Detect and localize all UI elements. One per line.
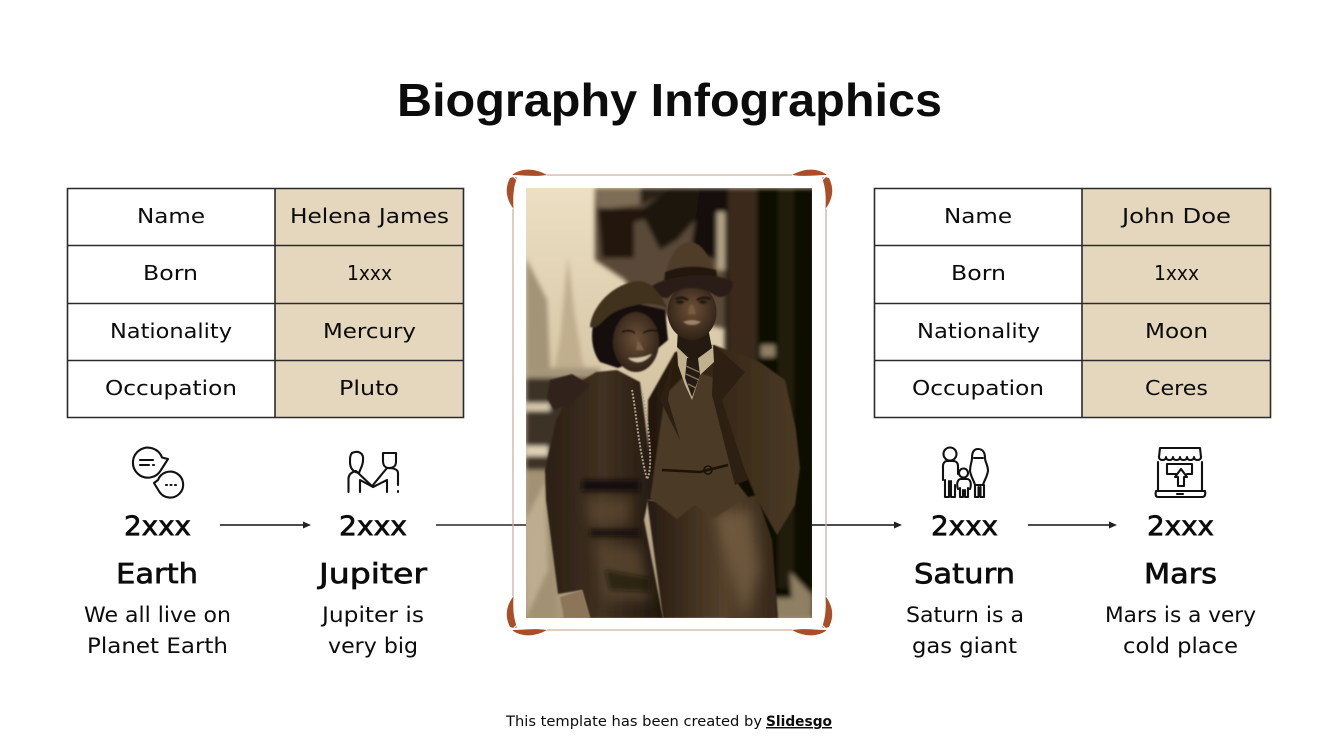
man hat <box>651 242 733 298</box>
icon: speech bubbles <box>133 448 183 498</box>
portrait photo <box>526 188 815 618</box>
panel: right biography table: 1xxx <box>1154 261 1199 285</box>
panel: right biography table: Nationality <box>917 319 1040 343</box>
panel: left biography table <box>68 188 464 418</box>
panel: left biography table: Name <box>137 204 205 228</box>
milestone: Saturn: Saturn is a <box>906 603 1024 627</box>
arrow: Jupiter to photo <box>436 524 527 526</box>
milestone: Jupiter: 2xxx <box>339 511 407 542</box>
panel: left biography table: Born <box>143 261 198 285</box>
panel: right biography table: Moon <box>1145 319 1208 343</box>
arrow: photo to Saturn <box>811 522 902 528</box>
milestone: Jupiter: Jupiter is <box>320 603 424 627</box>
woman hand on dress <box>560 590 590 618</box>
arrow: Earth to Jupiter <box>220 522 311 528</box>
milestone: Mars: Mars is a very <box>1105 603 1256 627</box>
man waistcoat <box>650 370 748 519</box>
milestone: Earth: Earth <box>116 557 198 590</box>
man hand on shoulder <box>547 374 590 410</box>
panel: right biography table: Ceres <box>1145 376 1208 400</box>
panel: right biography table <box>874 188 1271 418</box>
arrow: Saturn to Mars <box>1028 522 1117 528</box>
panel: right biography table: Born <box>951 261 1006 285</box>
man trousers <box>647 495 778 618</box>
frame border <box>513 175 826 630</box>
man shirt and tie <box>677 345 714 400</box>
milestone: Earth: Planet Earth <box>87 634 228 658</box>
panel: left biography table: Occupation <box>105 376 237 400</box>
milestone: Saturn: Saturn <box>914 557 1015 590</box>
panel: right biography table: Name <box>944 204 1012 228</box>
milestone: Jupiter <box>317 511 428 658</box>
footer credit: This template has been created by <box>505 714 762 730</box>
icon: handshake <box>348 452 398 492</box>
corner ornaments <box>507 170 832 635</box>
milestone: Saturn: 2xxx <box>931 511 998 542</box>
milestone: Mars: Mars <box>1144 557 1217 590</box>
milestone: Jupiter: Jupiter <box>317 557 428 590</box>
milestone: Saturn <box>906 511 1024 658</box>
street background <box>526 188 815 618</box>
woman necklace <box>632 390 650 479</box>
panel: left biography table: Helena James <box>290 204 449 228</box>
panel: left biography table: Pluto <box>339 376 399 400</box>
panel: right biography table: Occupation <box>912 376 1044 400</box>
panel: right biography table: John Doe <box>1120 204 1231 228</box>
panel: portrait frame <box>507 170 832 635</box>
woman hair and hat <box>590 281 668 372</box>
panel: left biography table: Mercury <box>323 319 416 343</box>
footer credit: Slidesgo <box>766 714 832 730</box>
milestone: Earth: We all live on <box>84 603 231 627</box>
icon: family <box>943 448 988 497</box>
man jacket <box>647 345 800 535</box>
milestone: Mars: cold place <box>1123 634 1238 658</box>
man neck and face <box>677 332 712 358</box>
icon: online shop laptop <box>1156 448 1205 497</box>
woman dress <box>545 370 663 618</box>
milestone: Mars <box>1105 511 1256 658</box>
milestone: Saturn: gas giant <box>912 634 1017 658</box>
panel: left biography table: Nationality <box>110 319 232 343</box>
title: Biography Infographics <box>397 74 942 126</box>
milestone: Mars: 2xxx <box>1147 511 1214 542</box>
panel: left biography table: 1xxx <box>347 261 392 285</box>
milestone: Earth <box>84 511 231 658</box>
milestone: Earth: 2xxx <box>124 511 191 542</box>
milestone: Jupiter: very big <box>328 634 418 658</box>
